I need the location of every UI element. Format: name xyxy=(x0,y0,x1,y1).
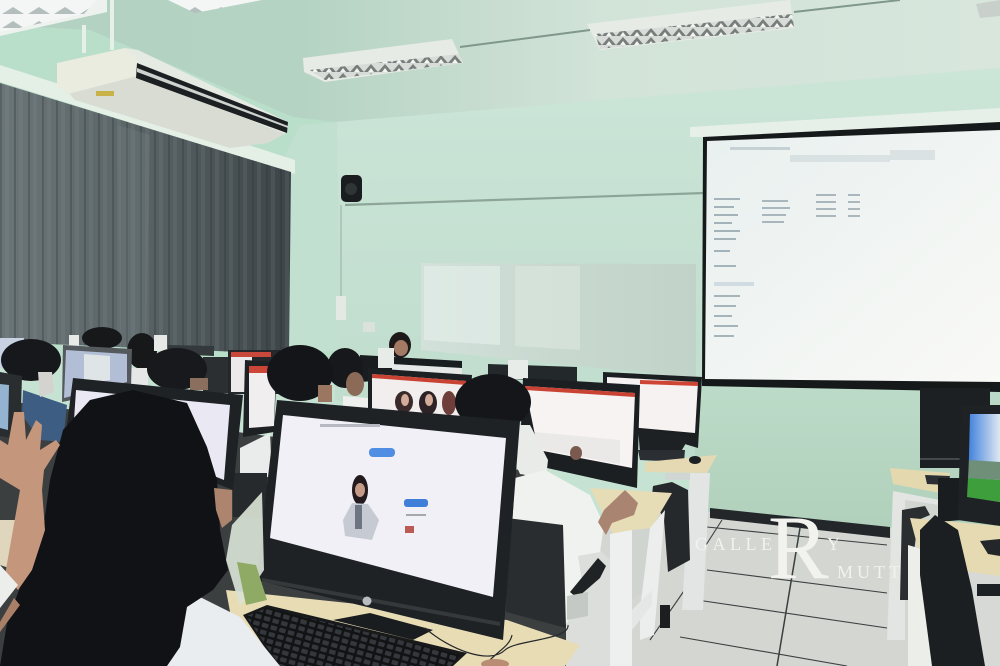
chair right back xyxy=(900,506,930,600)
floor xyxy=(566,505,1000,666)
whiteboard xyxy=(421,263,696,378)
conduit vertical xyxy=(340,205,342,298)
webpage button xyxy=(369,448,395,457)
chair mid xyxy=(652,482,690,628)
ceiling light top xyxy=(168,0,262,13)
conduit xyxy=(460,0,900,47)
trousers beside chair xyxy=(566,550,610,666)
ceiling light center xyxy=(303,39,463,82)
file explorer ribbon xyxy=(730,147,935,162)
lower wall xyxy=(695,385,1000,535)
webpage woman xyxy=(343,475,379,540)
student with glasses xyxy=(327,348,368,409)
skirting xyxy=(710,508,890,538)
chair arm right xyxy=(977,584,1000,596)
raised hand xyxy=(0,412,60,632)
loudspeaker xyxy=(341,175,362,202)
under-desk dark backdrop xyxy=(0,400,566,666)
wall ledge xyxy=(345,193,705,205)
curtain xyxy=(0,83,291,354)
monitor front left xyxy=(67,378,243,490)
ceiling light right xyxy=(587,0,794,50)
air conditioner xyxy=(57,48,288,148)
watermark: Y xyxy=(827,534,840,554)
watermark: GALLE xyxy=(695,534,772,554)
keyboard xyxy=(243,605,467,666)
student center-left xyxy=(233,345,333,518)
monitor stand xyxy=(333,613,433,640)
ceiling xyxy=(0,0,1000,130)
teacher at back xyxy=(389,332,411,358)
watermark: MUTT xyxy=(837,562,900,582)
right desk xyxy=(887,468,950,640)
desk center xyxy=(590,488,672,666)
desk front right xyxy=(908,518,1000,666)
webpage header xyxy=(320,424,380,427)
window valance xyxy=(0,65,295,174)
left wall xyxy=(0,25,335,360)
floor tile lines xyxy=(650,520,887,666)
projector screen xyxy=(702,122,1000,392)
front student long hair xyxy=(0,390,280,666)
monitor right back xyxy=(603,372,702,462)
second row monitor left xyxy=(243,360,277,437)
left desk xyxy=(0,520,45,580)
main monitor xyxy=(256,400,520,640)
student back row center xyxy=(147,348,208,390)
file explorer sidebar xyxy=(714,198,754,337)
hand at desk edge xyxy=(481,659,509,666)
cables xyxy=(425,625,568,660)
plastic bag and bottle xyxy=(226,492,267,606)
center back monitors xyxy=(360,348,577,382)
desk right xyxy=(645,455,717,610)
monitor with presentation xyxy=(368,368,472,416)
column xyxy=(281,122,340,352)
back wall xyxy=(335,68,1000,530)
monitor far left xyxy=(0,372,22,440)
student in white shirt xyxy=(455,374,638,625)
back row people and monitors xyxy=(0,327,280,394)
right side monitor back xyxy=(920,388,990,468)
watermark xyxy=(695,497,900,598)
monitor center right xyxy=(520,378,640,488)
main desk surface xyxy=(226,590,580,666)
chair right front xyxy=(920,515,985,666)
office chair center xyxy=(506,518,606,628)
watermark: R xyxy=(768,497,829,598)
monitor back left xyxy=(62,345,132,402)
switch panel xyxy=(336,296,375,332)
projector screen housing xyxy=(690,108,1000,137)
webpage panel xyxy=(404,499,428,533)
file explorer list xyxy=(762,194,860,223)
hp logo xyxy=(362,596,372,606)
student with mask left xyxy=(1,339,67,442)
ceiling light left xyxy=(0,0,114,53)
right monitor front xyxy=(958,405,1000,526)
ceiling light far right xyxy=(976,0,1000,18)
chair back behind right monitor xyxy=(938,478,962,522)
